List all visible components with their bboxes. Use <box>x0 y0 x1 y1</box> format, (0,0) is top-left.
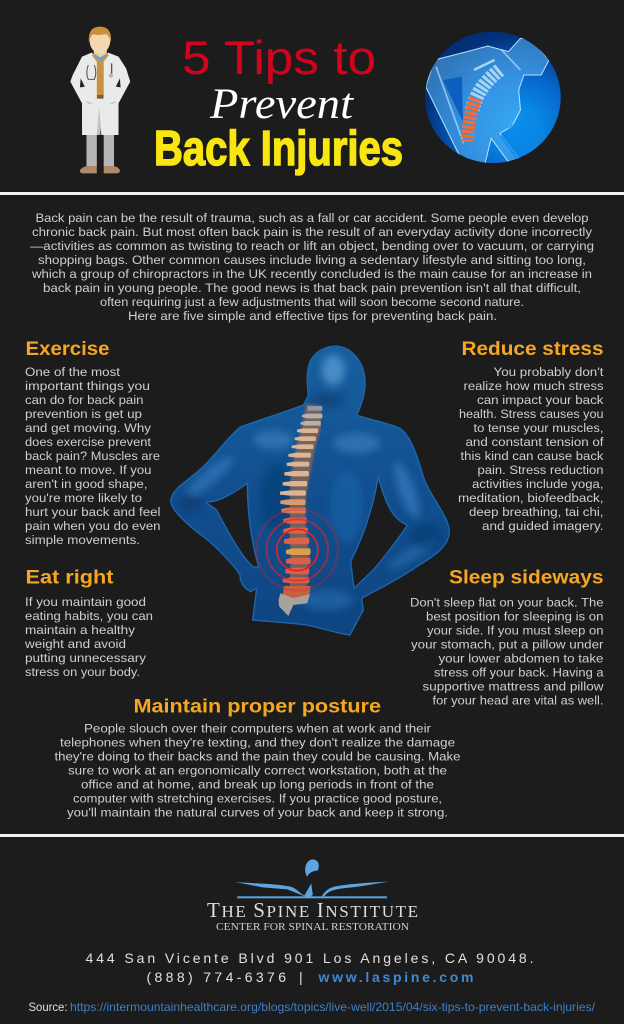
intro text block: —activities as common as twisting to reach or lift an object, bending over to vacuum, or carrying <box>30 239 594 253</box>
intro text block: shopping bags. Other common causes include living a sedentary lifestyle and sitting too long, <box>38 253 586 267</box>
text: sleep sideways body: your side. If you must sleep on <box>427 624 604 638</box>
text: reduce stress body: deep breathing, tai chi, <box>469 505 604 519</box>
text: exercise body: and get moving. Why <box>25 421 152 435</box>
intro text block: Here are five simple and effective tips for preventing back pain. <box>128 309 497 323</box>
text: sleep sideways body: stress off your back. Having a <box>434 666 604 680</box>
heading: sleep sideways: Sleep sideways <box>449 568 604 588</box>
title line: Back Injuries: Back Injuries <box>154 122 403 176</box>
intro text block <box>30 211 594 323</box>
divider <box>0 192 624 195</box>
title <box>154 31 403 176</box>
text: reduce stress body: meditation, biofeedback, <box>458 491 604 505</box>
red pain rings <box>257 509 338 591</box>
text: posture body <box>54 722 461 820</box>
intro text block: back pain in young people. The good news is that back pain prevention isn't all that difficult, <box>43 281 581 295</box>
text: exercise body: hurt your back and feel <box>25 505 160 519</box>
heading: eat right: Eat right <box>26 568 114 588</box>
text: reduce stress body: this kind can cause back <box>460 449 604 463</box>
text: posture body: sure to work at an ergonomically correct workstation, both at the <box>68 764 447 778</box>
text: sleep sideways body: for your head are vital as well. <box>432 694 604 708</box>
panel: exercise <box>25 339 160 547</box>
text: The Spine Institute: THE SPINE INSTITUTE <box>207 898 418 922</box>
intro text block: which a group of chiropractors in the UK recently concluded is the main cause for an increase in <box>31 267 592 281</box>
text: reduce stress body: health. Stress causes you <box>459 407 604 421</box>
text: exercise body: can do for back pain <box>25 393 144 407</box>
text: exercise body: back pain? Muscles are <box>25 449 160 463</box>
text: eat right body: weight and avoid <box>24 637 126 651</box>
text: Center for Spinal Restoration: CENTER FOR SPINAL RESTORATION <box>216 921 409 933</box>
heading: exercise: Exercise <box>26 339 110 360</box>
text: exercise body: does exercise prevent <box>25 435 152 449</box>
text: exercise body: One of the most <box>25 365 121 379</box>
text: exercise body: aren't in good shape, <box>25 477 148 491</box>
spine <box>279 405 322 616</box>
panel: maintain proper posture <box>54 696 461 820</box>
text: reduce stress body: to tense your muscles, <box>474 421 604 435</box>
text: eat right body: putting unnecessary <box>25 651 147 665</box>
text: sleep sideways body: supportive mattress and pillow <box>422 680 604 694</box>
text: reduce stress body: realize how much stress <box>464 379 604 393</box>
text: reduce stress body: activities include yoga, <box>472 477 604 491</box>
text: posture body: telephones when they're texting, and they don't realize the damage <box>60 736 455 750</box>
text: posture body: they're doing to their backs and the pain they could be causing. Make <box>54 750 461 764</box>
text: reduce stress body: and guided imagery. <box>482 519 604 533</box>
text: source: https://intermountainhealthcare.org/blogs/topics/live-well/2015/04/six-tips-to-prevent-back-injuries/ <box>70 1000 596 1014</box>
heading: maintain proper posture: Maintain proper posture <box>134 696 381 718</box>
logo: the spine institute <box>207 859 418 933</box>
text: phone and website: | <box>299 969 303 985</box>
text: eat right body: maintain a healthy <box>25 623 136 637</box>
panel: eat right <box>24 568 153 679</box>
text: phone and website: www.laspine.com <box>318 969 474 985</box>
icon: doctor <box>70 27 130 173</box>
intro text block: often requiring just a few adjustments that will soon become second nature. <box>100 295 524 309</box>
text: reduce stress body: You probably don't <box>494 365 604 379</box>
text: reduce stress body: pain. Stress reduction <box>478 463 604 477</box>
text: sleep sideways body: best position for sleeping is on <box>426 610 604 624</box>
text: source: Source: <box>28 1000 68 1014</box>
text: reduce stress body: can impact your back <box>477 393 604 407</box>
text: sleep sideways body <box>410 596 604 708</box>
text: sleep sideways body: Don't sleep flat on your back. The <box>410 596 604 610</box>
text: exercise body: prevention is get up <box>25 407 142 421</box>
panel: sleep sideways <box>410 568 604 708</box>
text: exercise body: simple movements. <box>25 533 140 547</box>
intro text block: chronic back pain. But most often back pain is the result of an everyday activity done incorrectly <box>32 225 593 239</box>
icon: blue skeleton bending figure <box>425 32 561 167</box>
text: exercise body: pain when you do even <box>25 519 160 533</box>
heading: reduce stress: Reduce stress <box>462 339 604 360</box>
intro text block: Back pain can be the result of trauma, such as a fall or car accident. Some people even develop <box>36 211 589 225</box>
illustration: blue human back with spine <box>171 346 449 635</box>
text: eat right body: If you maintain good <box>25 595 146 609</box>
text: phone and website <box>146 969 474 985</box>
divider <box>0 834 624 837</box>
text: posture body: you'll maintain the natural curves of your back and keep it strong. <box>67 806 448 820</box>
panel: reduce stress <box>458 339 604 533</box>
text: sleep sideways body: your stomach, put a pillow under <box>411 638 604 652</box>
text: sleep sideways body: your lower abdomen to take <box>438 652 604 666</box>
text: exercise body: important things you <box>25 379 150 393</box>
text: posture body: computer with stretching exercises. If you practice good posture, <box>73 792 442 806</box>
text: eat right body: stress on your body. <box>25 665 140 679</box>
text: reduce stress body <box>458 365 604 533</box>
text: eat right body: eating habits, you can <box>25 609 153 623</box>
text: posture body: office and at home, and break up long periods in front of the <box>81 778 434 792</box>
text: exercise body: meant to move. If you <box>25 463 152 477</box>
text: eat right body <box>24 595 153 679</box>
text: posture body: People slouch over their computers when at work and their <box>84 722 431 736</box>
text: exercise body <box>25 365 160 547</box>
text: reduce stress body: and constant tension of <box>466 435 604 449</box>
text: address: 444 San Vicente Blvd 901 Los Angeles, CA 90048. <box>86 950 534 966</box>
icon: spine institute mark <box>235 859 389 898</box>
text: phone and website: (888) 774-6376 <box>146 969 286 985</box>
title line: Prevent: Prevent <box>209 81 354 128</box>
title line: 5 Tips to: 5 Tips to <box>182 31 376 84</box>
text: exercise body: you're more likely to <box>25 491 142 505</box>
